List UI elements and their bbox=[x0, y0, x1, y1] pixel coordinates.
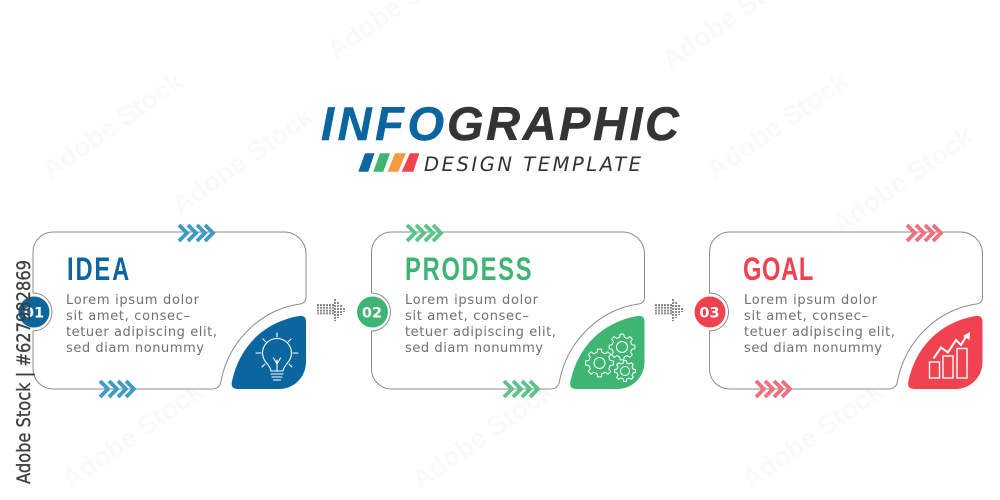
title bbox=[321, 97, 680, 150]
body text: sed diam nonummy bbox=[405, 341, 543, 356]
body text: Lorem ipsum dolor bbox=[744, 293, 878, 308]
card outline bbox=[33, 232, 306, 389]
text: Adobe Stock bbox=[406, 375, 559, 495]
body text: Lorem ipsum dolor bbox=[66, 293, 200, 308]
icon: light bulb bbox=[232, 316, 306, 389]
text: Adobe Stock bbox=[701, 65, 854, 185]
title: GRAPHIC bbox=[447, 97, 680, 150]
arrow: process to goal bbox=[655, 299, 682, 321]
body text: Lorem ipsum dolor bbox=[405, 293, 539, 308]
body text: tetuer adipiscing elit, bbox=[405, 325, 556, 340]
heading: GOAL bbox=[743, 252, 813, 287]
number badge: 03 bbox=[699, 306, 720, 322]
top chevrons bbox=[907, 225, 941, 241]
arrow: idea to process bbox=[317, 299, 344, 321]
number badge: 02 bbox=[362, 306, 382, 322]
text: Adobe Stock bbox=[56, 375, 209, 495]
icon: growth chart bbox=[908, 316, 982, 389]
heading: PRODESS bbox=[405, 252, 532, 287]
panel: idea bbox=[18, 225, 306, 397]
text: Adobe Stock bbox=[736, 375, 889, 495]
heading: IDEA bbox=[67, 252, 129, 287]
text: Adobe Stock bbox=[166, 100, 319, 220]
body text bbox=[744, 293, 895, 356]
body text bbox=[405, 293, 556, 356]
text: Adobe Stock bbox=[826, 120, 979, 240]
card outline bbox=[710, 232, 982, 389]
bottom chevrons bbox=[756, 381, 790, 397]
colour stripes bbox=[358, 153, 419, 172]
body text: tetuer adipiscing elit, bbox=[744, 325, 895, 340]
body text bbox=[66, 293, 217, 356]
stock id watermark: Adobe Stock | #627982869 bbox=[13, 260, 35, 484]
body text: sit amet, consec– bbox=[66, 309, 190, 324]
top chevrons bbox=[179, 225, 213, 241]
body text: sit amet, consec– bbox=[744, 309, 868, 324]
bottom chevrons bbox=[504, 381, 538, 397]
title: INFO bbox=[321, 97, 444, 150]
panel: goal bbox=[694, 225, 982, 397]
subtitle: DESIGN TEMPLATE bbox=[424, 153, 642, 176]
icon: gears bbox=[570, 316, 644, 389]
text: Adobe Stock bbox=[36, 65, 189, 185]
body text: sit amet, consec– bbox=[405, 309, 529, 324]
card outline bbox=[372, 232, 644, 389]
number badge bbox=[694, 296, 726, 328]
top chevrons bbox=[407, 225, 441, 241]
bottom chevrons bbox=[100, 381, 134, 397]
body text: sed diam nonummy bbox=[66, 341, 204, 356]
body text: sed diam nonummy bbox=[744, 341, 882, 356]
number badge: 01 bbox=[24, 306, 44, 322]
number badge bbox=[18, 296, 50, 328]
number badge bbox=[357, 296, 388, 328]
body text: tetuer adipiscing elit, bbox=[66, 325, 217, 340]
panel: process bbox=[357, 225, 644, 397]
